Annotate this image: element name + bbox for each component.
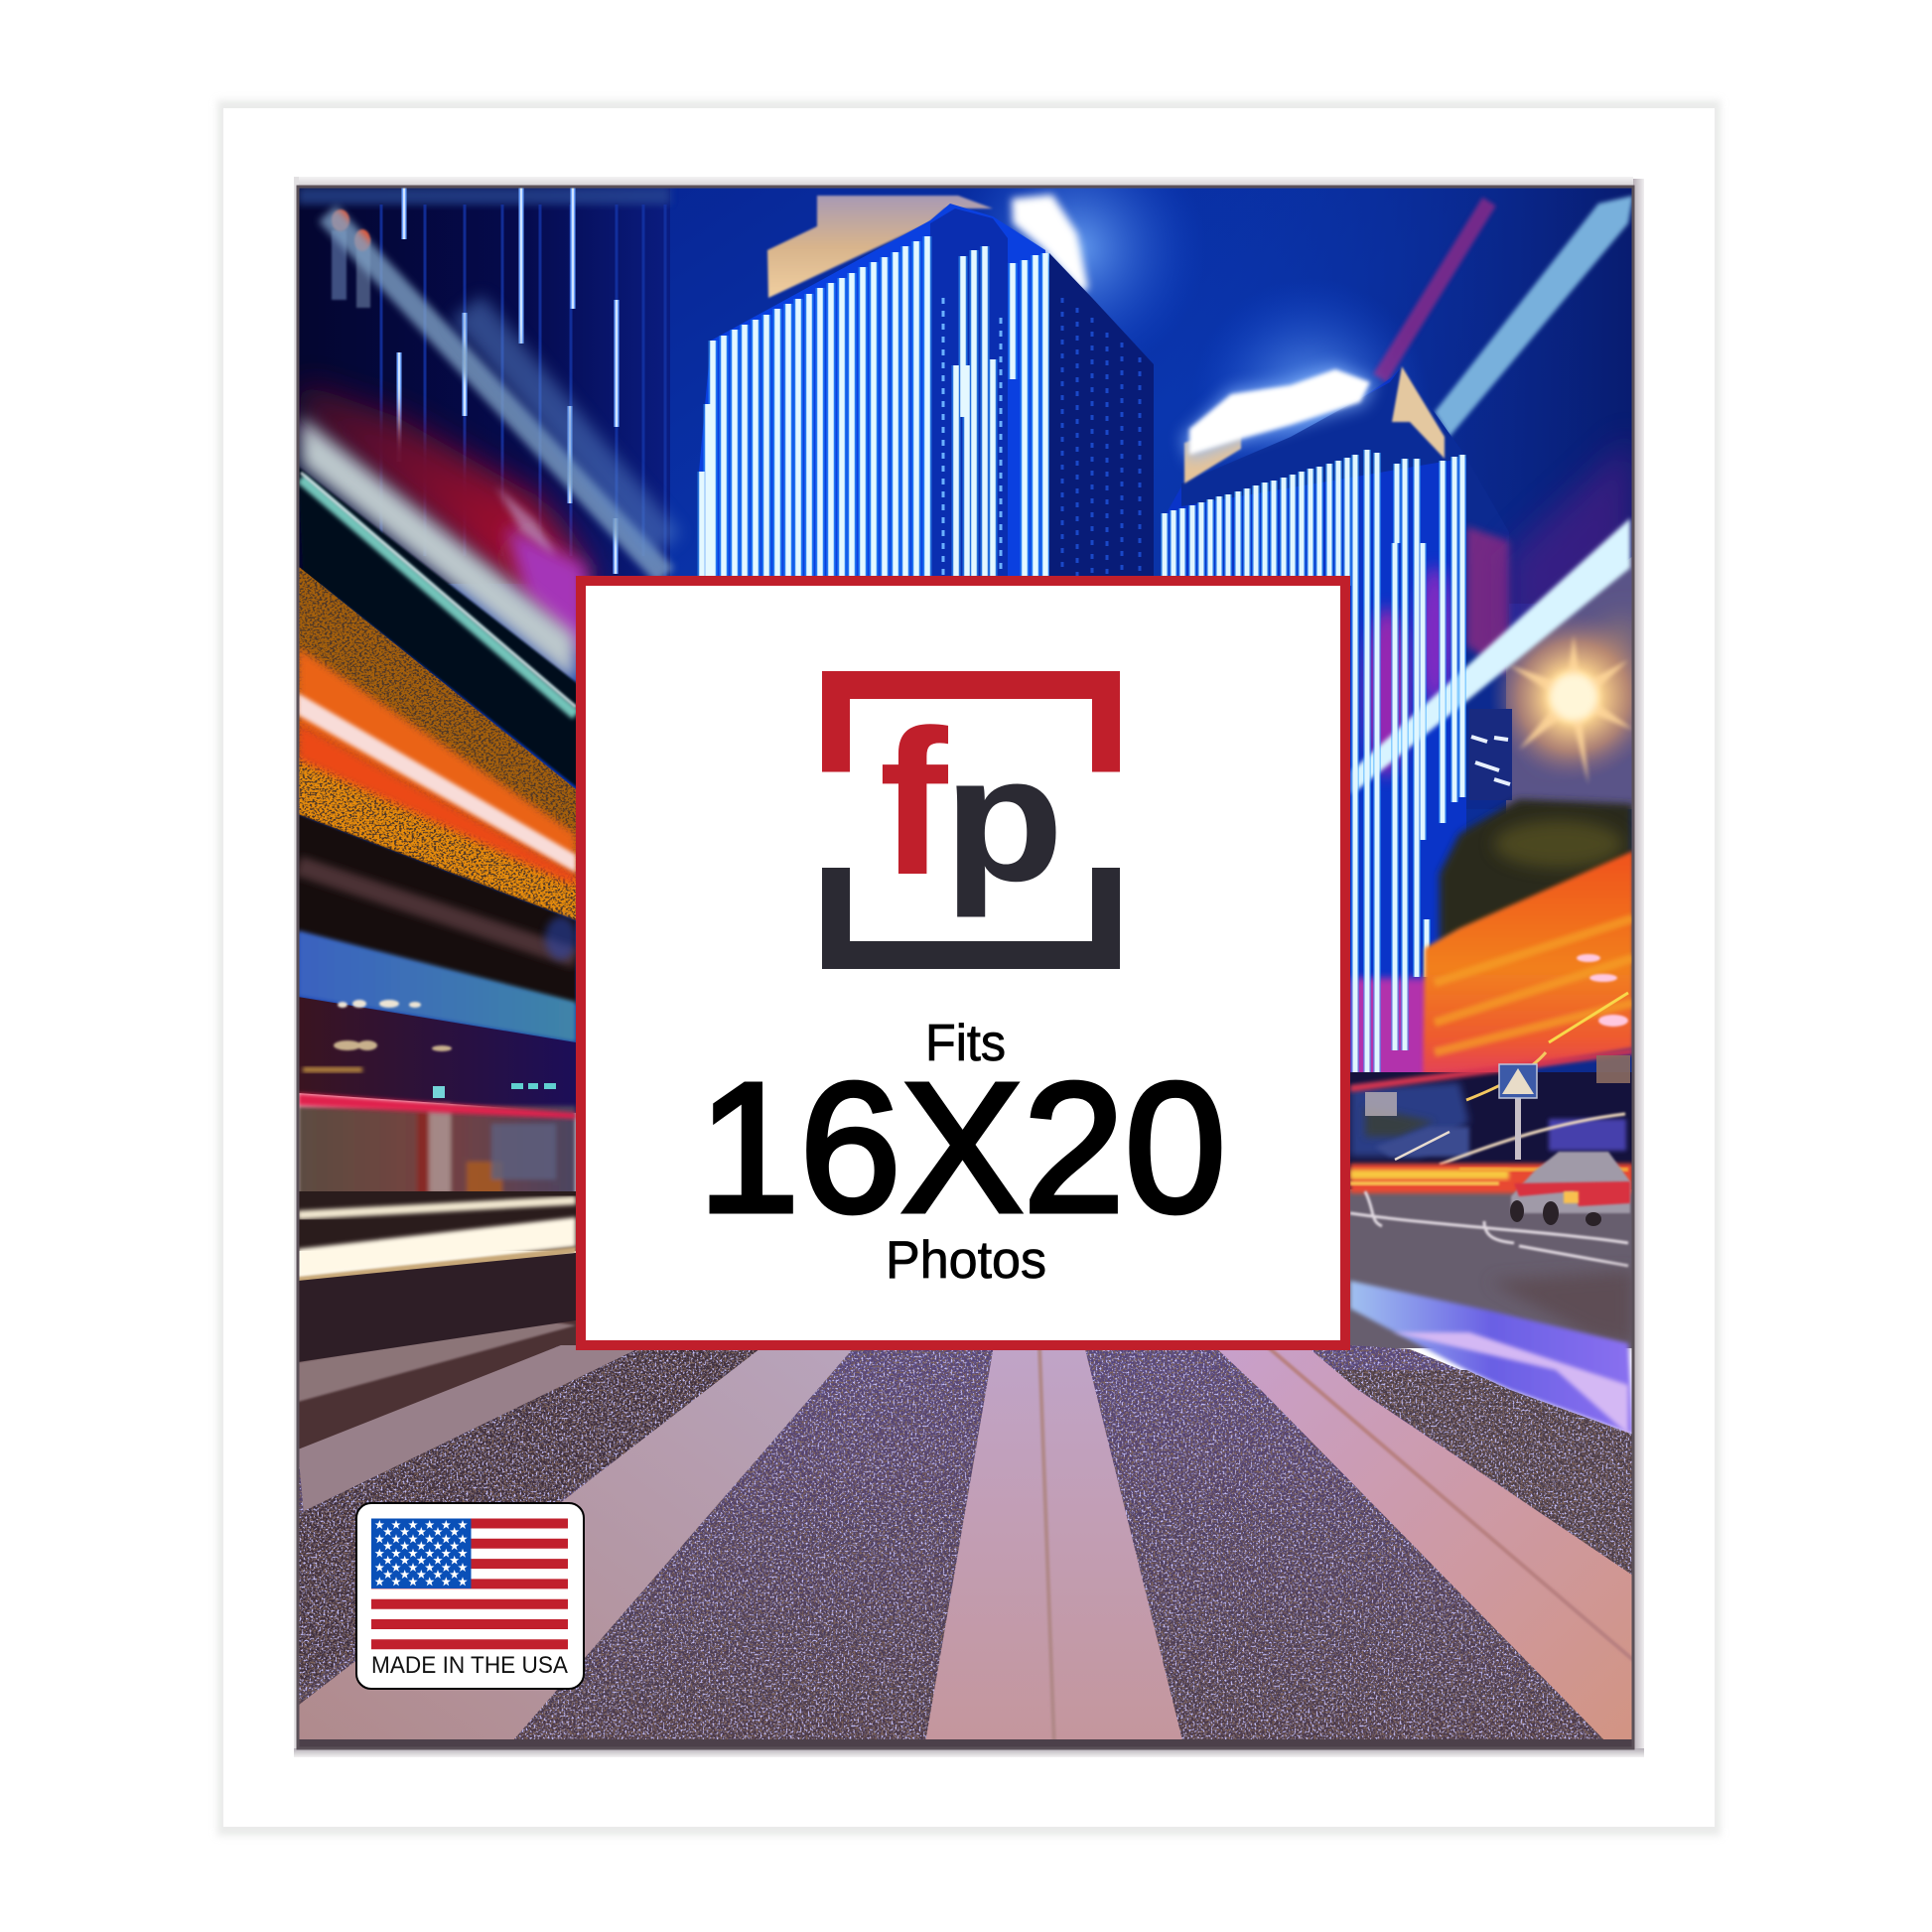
- picture frame: [217, 100, 1721, 1836]
- photo: city night traffic light trails: [298, 119, 1658, 1748]
- road dark asphalt band: [298, 1345, 772, 1688]
- logo letter p: p: [944, 720, 1063, 917]
- road sign: [1499, 1064, 1537, 1160]
- logo letter f: f: [879, 688, 948, 918]
- sunburst street light: [1489, 613, 1658, 784]
- infographic canvas: [216, 99, 1722, 1837]
- main tower dark side face: [1049, 253, 1154, 586]
- road right brown lane: [1330, 1370, 1633, 1576]
- icon: US flag: [371, 1519, 568, 1649]
- callout: white size box with red border: [581, 581, 1345, 1345]
- road base asphalt: [298, 1345, 1633, 1748]
- text: Photos: Photos: [886, 1231, 1046, 1290]
- road left tan lane: [298, 1345, 645, 1514]
- sky: [298, 187, 1633, 1080]
- tree line and orange light band: [1423, 799, 1633, 1086]
- main tower crown: [767, 195, 1088, 298]
- main tower front face: [699, 204, 1049, 586]
- text: 16X20: 16X20: [698, 1045, 1226, 1251]
- right lilac light trail: [1350, 1281, 1633, 1435]
- road stripe right: [1213, 1345, 1633, 1748]
- left pale beams: [298, 213, 665, 794]
- road stripe centre: [924, 1345, 1184, 1748]
- left storefront reflection: [298, 997, 576, 1200]
- text: Fits: Fits: [925, 1015, 1006, 1072]
- left red and magenta blur: [301, 382, 586, 660]
- white beam: [1352, 518, 1630, 794]
- left white headlight trails: [300, 1191, 576, 1281]
- logo bracket red: [822, 671, 1120, 772]
- second tower body: [1165, 365, 1466, 1087]
- photo inner edge line: [298, 187, 1633, 1748]
- logo bracket dark: [822, 868, 1120, 969]
- logo: [822, 671, 1120, 969]
- right purple streaks: [1506, 437, 1633, 814]
- left dark building with vertical streaks: [298, 185, 670, 584]
- road left brown lane: [298, 1253, 576, 1449]
- right street scene: [1350, 1048, 1633, 1348]
- road stripe left: [298, 1345, 856, 1748]
- pink beam: [1380, 202, 1489, 378]
- second tower right face: [1466, 458, 1509, 809]
- badge: made in the USA: [356, 1503, 584, 1689]
- car: [1510, 1152, 1630, 1226]
- left amber light trails: [298, 566, 576, 920]
- text: MADE IN THE USA: MADE IN THE USA: [371, 1652, 569, 1679]
- left dark road shade band: [298, 814, 577, 1005]
- small background building lights: [1469, 709, 1512, 800]
- second tower light stripes: [1165, 450, 1462, 1082]
- left blue light trail: [298, 930, 576, 1042]
- pale blue beam: [1435, 196, 1633, 437]
- tower glow: [977, 189, 1410, 459]
